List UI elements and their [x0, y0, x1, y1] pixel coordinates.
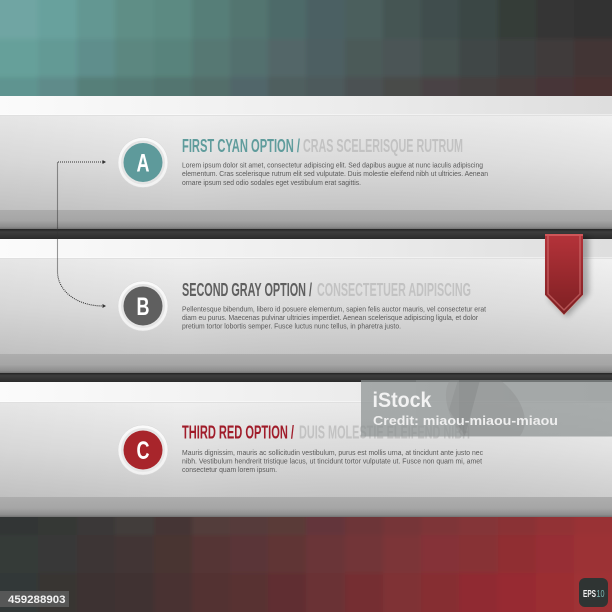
- icon: circle A: A: [137, 149, 150, 177]
- heading: third red option: THIRD RED OPTION /: [182, 422, 294, 442]
- text block: option C description: nibh. Vestibulum hendrerit tristique lacus, ut tincidunt tortor vulputate ut. Fusce non quam mi, amet: [182, 459, 482, 466]
- heading: second gray option: SECOND GRAY OPTION /: [182, 279, 312, 300]
- panel: band A: [0, 96, 612, 239]
- icon: circle B: B: [137, 292, 149, 321]
- heading: second gray option: CONSECTETUER ADIPISCING: [317, 279, 471, 300]
- badge: EPS 10: EPS: [583, 589, 596, 600]
- text block: option A description: [182, 163, 488, 187]
- panel: bottom red mosaic: [0, 510, 612, 612]
- panel: band C: [0, 382, 612, 517]
- label: image number: [0, 591, 69, 607]
- text block: option C description: [182, 450, 483, 474]
- icon: red ribbon bookmark: [545, 234, 589, 317]
- text block: option C description: consectetur quam lorem ipsum.: [182, 467, 277, 474]
- heading: first cyan option: CRAS SCELERISQUE RUTRUM: [303, 135, 463, 156]
- heading: third red option: [182, 422, 470, 442]
- text block: option A description: Lorem ipsum dolor sit amet, consectetur adipiscing elit. Sed dapibus augue at nunc iaculis adipiscing: [182, 163, 483, 170]
- icon: circle C: [118, 425, 168, 475]
- icon: circle B: [118, 281, 168, 331]
- text block: option A description: elementum. Cras scelerisque rutrum elit sed vulputate. Duis molestie eleifend nibh ut ultricies. Aenean: [182, 171, 488, 178]
- label: image number: 459288903: [8, 594, 66, 606]
- text block: option B description: pretium tortor lobortis semper. Fusce luctus nunc tellus, in pharetra justo.: [182, 324, 401, 331]
- badge: EPS 10: [579, 578, 608, 607]
- text block: option B description: diam eu purus. Maecenas pulvinar ultricies imperdiet. Aenean scelerisque adipiscing ligula, et dolor: [182, 315, 479, 322]
- text block: option B description: Pellentesque bibendum, libero id posuere elementum, sapien felis auctor mauris, vel consectetur erat: [182, 306, 486, 313]
- panel: band B: [0, 239, 612, 382]
- text block: option B description: [182, 306, 486, 331]
- badge: EPS 10: 10: [596, 589, 605, 600]
- icon: circle C: C: [137, 436, 150, 465]
- text block: option C description: Mauris dignissim, mauris ac sollicitudin vestibulum, purus est mollis urna, at tincidunt ante justo nec: [182, 450, 483, 457]
- watermark: iStock credit: [361, 380, 612, 436]
- watermark: iStock credit: iStock: [372, 388, 432, 412]
- watermark: iStock credit: Credit: miaou-miaou-miaou: [373, 414, 558, 428]
- text block: option A description: ornare ipsum sed odio sodales eget vestibulum erat sagittis.: [182, 180, 361, 187]
- panel: top teal mosaic: [0, 0, 612, 103]
- arrow: dotted connector from A to B: [58, 160, 106, 308]
- heading: first cyan option: FIRST CYAN OPTION /: [182, 135, 300, 156]
- heading: third red option: DUIS MOLESTIE ELEIFEND NIBH: [299, 422, 470, 442]
- icon: circle A: [118, 138, 168, 188]
